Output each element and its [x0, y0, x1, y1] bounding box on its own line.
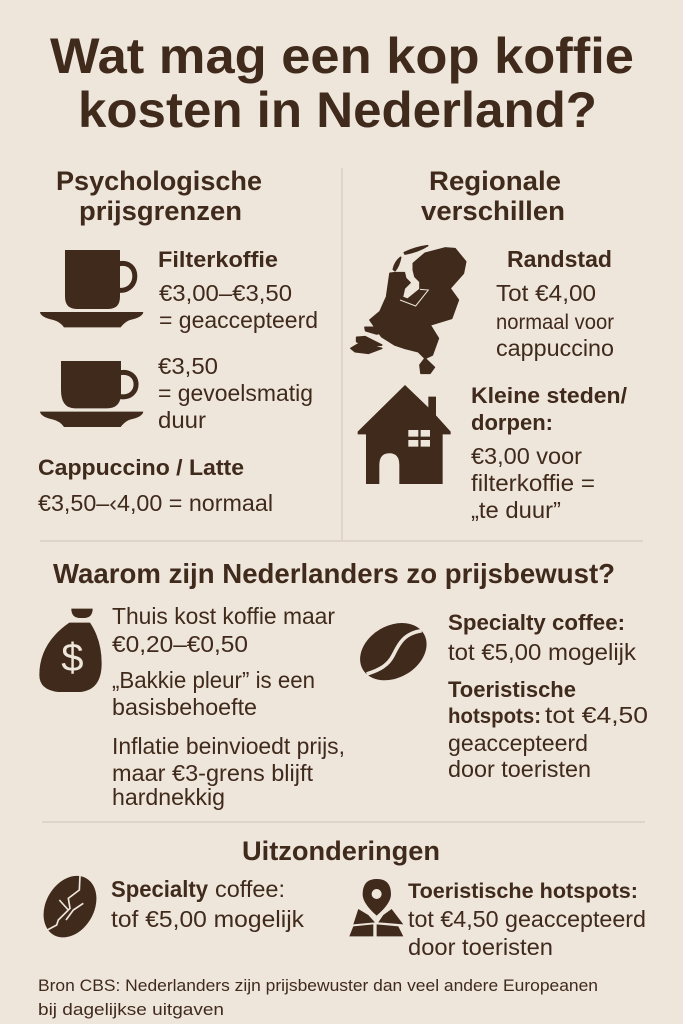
- text: filterkoffie: Filterkoffie: [158, 247, 278, 272]
- text: specialty coffee: [111, 876, 305, 932]
- text: randstad: cappuccino: [496, 335, 614, 361]
- icon: map pin: [349, 879, 403, 936]
- heading: regionale verschillen: Regionale: [429, 166, 561, 196]
- text: specialty en toeristische hotspots: tot €4,50: [545, 702, 648, 728]
- text: gevoelsmatig duur: €3,50: [158, 353, 218, 379]
- text: redenen prijsbewustzijn: basisbehoefte: [112, 694, 257, 720]
- text: redenen prijsbewustzijn: „Bakkie pleur” is een: [112, 667, 315, 693]
- title: Wat mag een kop koffie: [50, 28, 634, 84]
- icon: coffee bean: [350, 611, 437, 692]
- text: filterkoffie: €3,00–€3,50: [159, 280, 292, 306]
- text: redenen prijsbewustzijn: [112, 603, 345, 810]
- text: randstad: [496, 246, 614, 361]
- text: kleine steden en dorpen: Kleine steden/: [471, 383, 627, 408]
- text: specialty en toeristische hotspots: door toeristen: [448, 756, 591, 782]
- text: randstad: Tot €4,00: [496, 280, 596, 306]
- text: redenen prijsbewustzijn: Inflatie beinvioedt prijs,: [112, 733, 345, 759]
- icon: house: [358, 385, 451, 484]
- text: gevoelsmatig duur: duur: [158, 407, 206, 433]
- heading: regionale verschillen: verschillen: [421, 196, 565, 226]
- text: gevoelsmatig duur: [158, 353, 313, 433]
- icon: map of the Netherlands: [351, 246, 466, 373]
- text: redenen prijsbewustzijn: Thuis kost koffie maar: [112, 603, 335, 629]
- panel: regionale verschillen: [351, 166, 627, 523]
- text: kleine steden en dorpen: filterkoffie =: [471, 470, 595, 496]
- panel: waarom prijsbewust: [39, 558, 648, 810]
- text: randstad: Randstad: [507, 246, 612, 272]
- panel: uitzonderingen: [33, 836, 646, 960]
- text: toeristische hotspots: door toeristen: [408, 934, 553, 960]
- heading: uitzonderingen: Uitzonderingen: [242, 836, 440, 866]
- source note: bij dagelijkse uitgaven: [38, 1000, 224, 1019]
- icon: cracked coffee bean: [33, 866, 107, 947]
- heading: waarom prijsbewust: Waarom zijn Nederlanders zo prijsbewust?: [53, 558, 615, 589]
- text: cappuccino latte: Cappuccino / Latte: [38, 455, 244, 480]
- heading: psychologische prijsgrenzen: Psychologische: [56, 166, 262, 196]
- source note: [38, 976, 598, 1019]
- icon: money bag: [39, 609, 102, 692]
- text: specialty coffee: coffee:: [215, 876, 285, 902]
- text: kleine steden en dorpen: €3,00 voor: [471, 443, 582, 469]
- text: cappuccino latte: €3,50–‹4,00 = normaal: [38, 490, 273, 516]
- heading: psychologische prijsgrenzen: [56, 166, 262, 226]
- text: gevoelsmatig duur: = gevoelsmatig: [158, 380, 313, 406]
- text: kleine steden en dorpen: [471, 383, 627, 523]
- text: toeristische hotspots: [408, 879, 646, 960]
- text: kleine steden en dorpen: dorpen:: [471, 410, 553, 435]
- text: specialty en toeristische hotspots: [448, 610, 648, 782]
- text: specialty en toeristische hotspots: Specialty coffee:: [448, 610, 625, 635]
- text: specialty en toeristische hotspots: hotspots:: [448, 705, 541, 728]
- text: redenen prijsbewustzijn: hardnekkig: [112, 784, 225, 810]
- text: redenen prijsbewustzijn: €0,20–€0,50: [112, 631, 248, 657]
- heading: psychologische prijsgrenzen: prijsgrenzen: [79, 196, 242, 226]
- text: filterkoffie: [158, 247, 318, 333]
- text: filterkoffie: = geaccepteerd: [159, 307, 318, 333]
- icon: money bag: $: [61, 636, 83, 680]
- text: specialty en toeristische hotspots: Toeristische: [448, 677, 576, 702]
- text: kleine steden en dorpen: „te duur”: [471, 497, 561, 523]
- text: redenen prijsbewustzijn: maar €3-grens blijft: [112, 760, 314, 786]
- icon: low coffee cup: [40, 361, 143, 427]
- text: specialty coffee: Specialty: [111, 876, 208, 902]
- text: cappuccino latte: [38, 455, 273, 516]
- text: specialty coffee: tof €5,00 mogelijk: [111, 906, 305, 932]
- title: [50, 28, 634, 138]
- text: specialty en toeristische hotspots: tot €5,00 mogelijk: [448, 639, 637, 665]
- heading: regionale verschillen: [421, 166, 565, 226]
- panel: psychologische prijsgrenzen: [38, 166, 318, 516]
- source note: Bron CBS: Nederlanders zijn prijsbewuster dan veel andere Europeanen: [38, 976, 598, 995]
- icon: tall coffee cup: [40, 250, 143, 327]
- text: specialty en toeristische hotspots: geaccepteerd: [448, 730, 588, 756]
- title: kosten in Nederland?: [78, 82, 597, 138]
- text: toeristische hotspots: Toeristische hotspots:: [408, 879, 638, 903]
- text: randstad: normaal voor: [496, 310, 614, 334]
- text: toeristische hotspots: tot €4,50 geaccepteerd: [408, 906, 646, 932]
